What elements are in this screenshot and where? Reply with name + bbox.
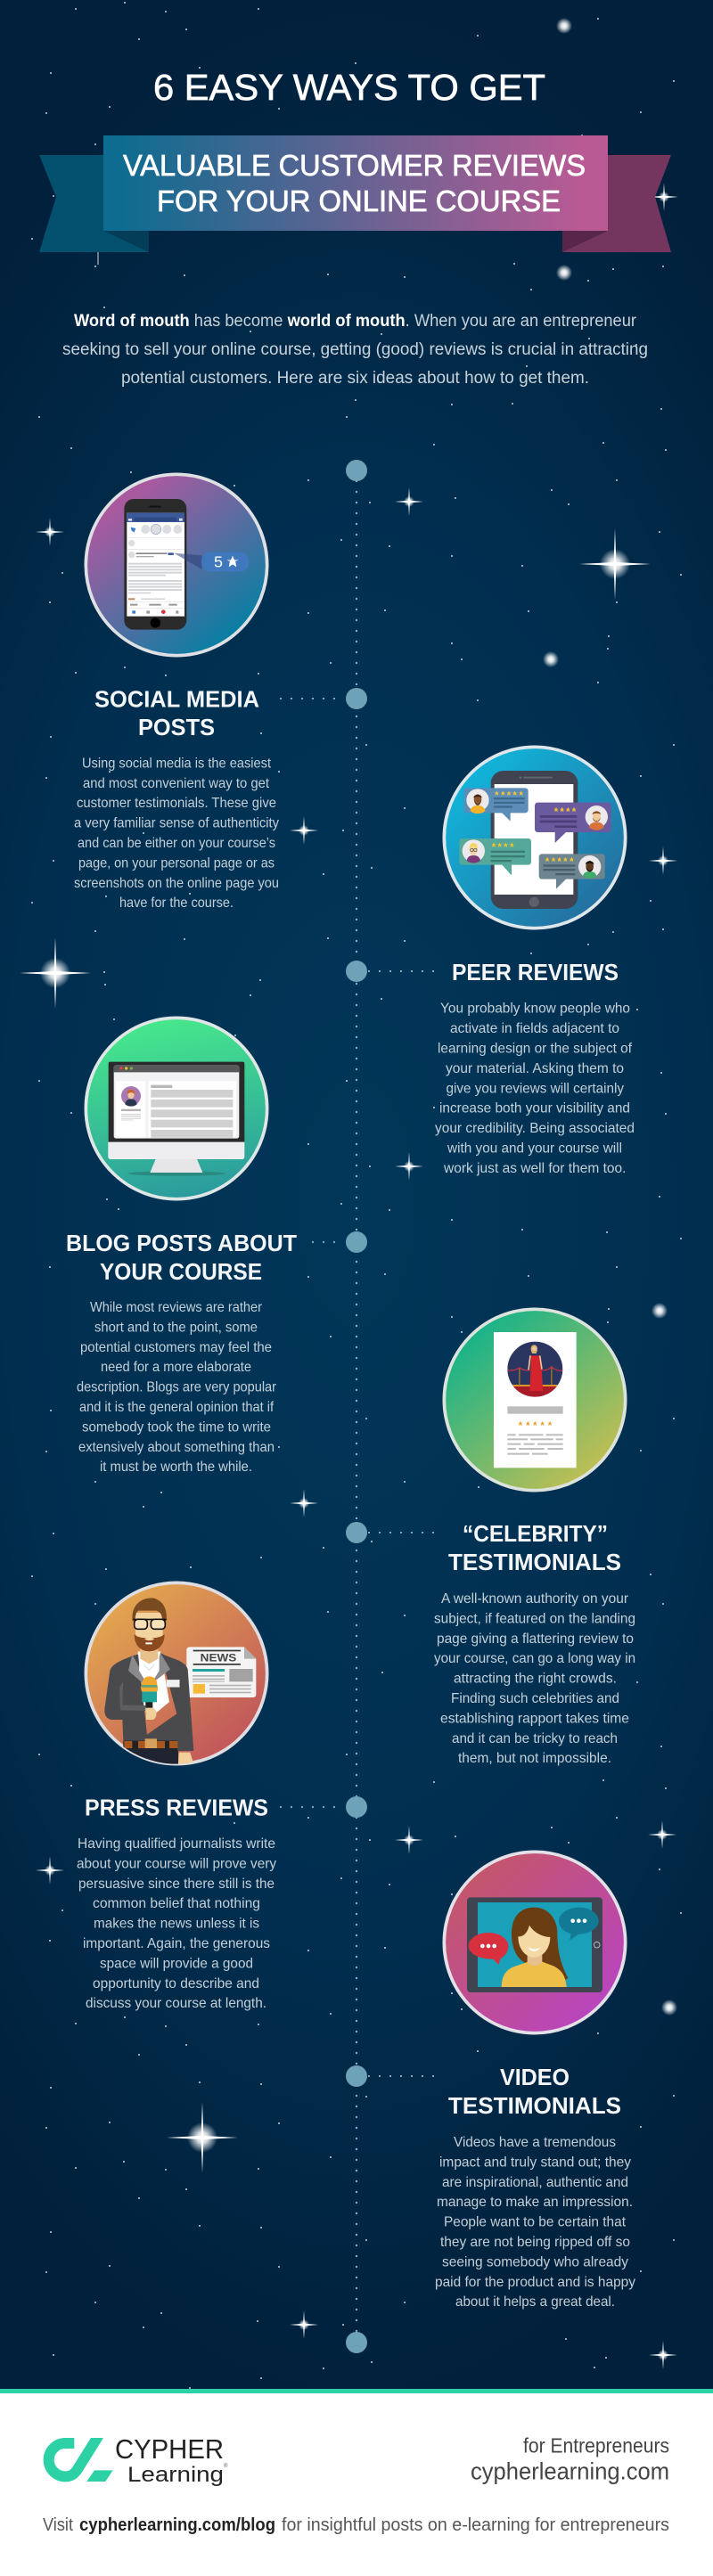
heading: celebrity testimonials: TESTIMONIALS bbox=[448, 1549, 621, 1575]
footer bbox=[0, 2389, 713, 2534]
body: social media posts: have for the course. bbox=[119, 895, 234, 911]
body: peer reviews: your credibility. Being associated bbox=[435, 1121, 635, 1136]
body: blog posts about your course: potential customers may feel the bbox=[80, 1340, 272, 1355]
body: blog posts about your course: and it is the general opinion that if bbox=[79, 1400, 274, 1415]
icon: news reporter with microphone and newspaper bbox=[86, 1582, 267, 1767]
ribbon banner bbox=[39, 135, 671, 252]
intro text: seeking to sell your online course, getting (good) reviews is crucial in attracting bbox=[62, 340, 648, 359]
body: celebrity testimonials bbox=[434, 1591, 635, 1766]
panel: blog posts about your course bbox=[66, 1018, 297, 1475]
body: social media posts bbox=[74, 756, 279, 911]
body: celebrity testimonials: them, but not impossible. bbox=[458, 1751, 611, 1766]
body: peer reviews: work just as well for them too. bbox=[443, 1161, 626, 1176]
heading: blog posts about your course: YOUR COURSE bbox=[100, 1258, 262, 1285]
body: press reviews: persuasive since there still is the bbox=[78, 1877, 275, 1892]
body: press reviews: important. Again, the generous bbox=[83, 1936, 270, 1951]
body: press reviews: opportunity to describe and bbox=[93, 1976, 259, 1991]
body: celebrity testimonials: and it can be tricky to reach bbox=[452, 1731, 618, 1746]
heading: social media posts: SOCIAL MEDIA bbox=[94, 686, 259, 713]
body: video testimonials: impact and truly stand out; they bbox=[439, 2155, 631, 2170]
body: blog posts about your course: While most reviews are rather bbox=[90, 1300, 263, 1315]
heading: peer reviews: PEER REVIEWS bbox=[452, 959, 619, 985]
body: video testimonials: about it helps a great deal. bbox=[455, 2294, 615, 2310]
icon: phone with 5 star post: 5 bbox=[214, 553, 223, 571]
body: celebrity testimonials: page giving a flattering review to bbox=[437, 1631, 634, 1647]
body: celebrity testimonials: your course, can go a long way in bbox=[434, 1651, 635, 1666]
heading: video testimonials bbox=[448, 2064, 621, 2119]
footer: audience and website bbox=[471, 2434, 669, 2484]
body: press reviews: makes the news unless it is bbox=[94, 1917, 259, 1932]
heading: social media posts bbox=[94, 686, 259, 740]
heading: press reviews: PRESS REVIEWS bbox=[85, 1795, 268, 1821]
body: social media posts: page, on your personal page or as bbox=[78, 855, 275, 871]
body: peer reviews: with you and your course will bbox=[447, 1141, 622, 1157]
heading: video testimonials: VIDEO bbox=[500, 2064, 570, 2090]
body: peer reviews: You probably know people who bbox=[440, 1002, 630, 1017]
logo: Cypher Learning: Learning bbox=[127, 2463, 224, 2487]
icon: phone with review bubbles bbox=[444, 747, 626, 928]
icon: celebrity review card bbox=[444, 1309, 626, 1491]
body: blog posts about your course: it must be worth the while. bbox=[100, 1460, 252, 1475]
body: blog posts about your course: extensively about something than bbox=[78, 1440, 275, 1455]
body: press reviews: common belief that nothing bbox=[93, 1896, 260, 1911]
body: press reviews: about your course will prove very bbox=[77, 1856, 276, 1871]
body: blog posts about your course bbox=[77, 1300, 277, 1475]
body: video testimonials: are inspirational, authentic and bbox=[442, 2175, 628, 2190]
body: press reviews bbox=[77, 1836, 276, 2011]
icon: desktop monitor with blog post bbox=[86, 1018, 267, 1199]
body: social media posts: Using social media is the easiest bbox=[82, 756, 272, 771]
heading: social media posts: POSTS bbox=[138, 714, 215, 740]
panel: celebrity testimonials bbox=[434, 1309, 635, 1766]
body: celebrity testimonials: A well-known authority on your bbox=[441, 1591, 629, 1607]
heading: celebrity testimonials bbox=[448, 1520, 621, 1575]
body: peer reviews: your material. Asking them to bbox=[446, 1061, 624, 1076]
footer: audience and website: cypherlearning.com bbox=[471, 2457, 669, 2484]
footer: audience and website: for Entrepreneurs bbox=[523, 2434, 669, 2457]
footer: blog invitation: cypherlearning.com/blog bbox=[79, 2515, 275, 2535]
panel: peer reviews bbox=[435, 747, 635, 1176]
body: video testimonials bbox=[435, 2135, 635, 2310]
body: celebrity testimonials: Finding such celebrities and bbox=[451, 1691, 619, 1706]
body: social media posts: customer testimonials. These give bbox=[77, 796, 276, 811]
body: video testimonials: seeing somebody who already bbox=[442, 2254, 628, 2269]
body: video testimonials: they are not being ripped off so bbox=[440, 2235, 630, 2250]
body: video testimonials: manage to make an impression. bbox=[437, 2195, 633, 2210]
heading: celebrity testimonials: “CELEBRITY” bbox=[463, 1520, 608, 1547]
body: blog posts about your course: description. Blogs are very popular bbox=[77, 1380, 277, 1395]
intro text bbox=[62, 312, 648, 388]
body: social media posts: and most convenient way to get bbox=[83, 776, 270, 791]
footer: blog invitation: Visit bbox=[43, 2515, 73, 2535]
ribbon banner: FOR YOUR ONLINE COURSE bbox=[157, 184, 561, 217]
panel: press reviews bbox=[77, 1582, 276, 2011]
logo: Cypher Learning: ® bbox=[224, 2463, 228, 2469]
body: celebrity testimonials: establishing rapport takes time bbox=[440, 1711, 629, 1726]
body: peer reviews: activate in fields adjacent to bbox=[450, 1021, 619, 1036]
logo: Cypher Learning bbox=[49, 2433, 228, 2487]
intro text: Word of mouth has become world of mouth. When you are an entrepreneur bbox=[74, 312, 637, 331]
heading: video testimonials: TESTIMONIALS bbox=[448, 2092, 621, 2119]
timeline bbox=[281, 460, 434, 2353]
body: peer reviews: give you reviews will certainly bbox=[446, 1081, 624, 1096]
body: social media posts: screenshots on the online page you bbox=[74, 876, 279, 891]
body: blog posts about your course: short and to the point, some bbox=[94, 1320, 258, 1335]
body: press reviews: discuss your course at length. bbox=[86, 1996, 266, 2011]
logo: Cypher Learning: CYPHER bbox=[115, 2433, 224, 2465]
icon: news reporter with microphone and newspaper: NEWS bbox=[201, 1652, 236, 1664]
body: video testimonials: Videos have a tremendous bbox=[454, 2135, 616, 2150]
body: celebrity testimonials: subject, if featured on the landing bbox=[434, 1611, 635, 1626]
ribbon banner: VALUABLE CUSTOMER REVIEWS bbox=[123, 149, 586, 182]
heading: blog posts about your course bbox=[66, 1230, 297, 1285]
body: peer reviews bbox=[435, 1002, 635, 1176]
panel: video testimonials bbox=[435, 1852, 635, 2310]
body: peer reviews: increase both your visibility and bbox=[439, 1101, 630, 1116]
body: video testimonials: People want to be certain that bbox=[444, 2215, 627, 2230]
icon: phone with 5 star post bbox=[86, 474, 267, 656]
body: blog posts about your course: somebody took the time to write bbox=[82, 1419, 271, 1435]
body: peer reviews: learning design or the subject of bbox=[438, 1041, 633, 1057]
body: video testimonials: paid for the product and is happy bbox=[435, 2275, 635, 2290]
intro text: potential customers. Here are six ideas about how to get them. bbox=[121, 369, 589, 388]
body: social media posts: and can be either on your course’s bbox=[78, 836, 275, 851]
body: social media posts: a very familiar sense of authenticity bbox=[74, 816, 279, 831]
body: celebrity testimonials: attracting the right crowds. bbox=[454, 1672, 617, 1687]
title: 6 EASY WAYS TO GET bbox=[153, 67, 545, 108]
heading: blog posts about your course: BLOG POSTS ABOUT bbox=[66, 1230, 297, 1256]
body: press reviews: Having qualified journalists write bbox=[78, 1836, 275, 1852]
icon: tablet with woman on video bbox=[444, 1852, 626, 2033]
body: blog posts about your course: need for a more elaborate bbox=[101, 1360, 251, 1375]
panel: social media posts bbox=[74, 474, 279, 911]
body: press reviews: space will provide a good bbox=[100, 1956, 253, 1971]
footer: blog invitation: for insightful posts on e-learning for entrepreneurs bbox=[282, 2515, 669, 2535]
